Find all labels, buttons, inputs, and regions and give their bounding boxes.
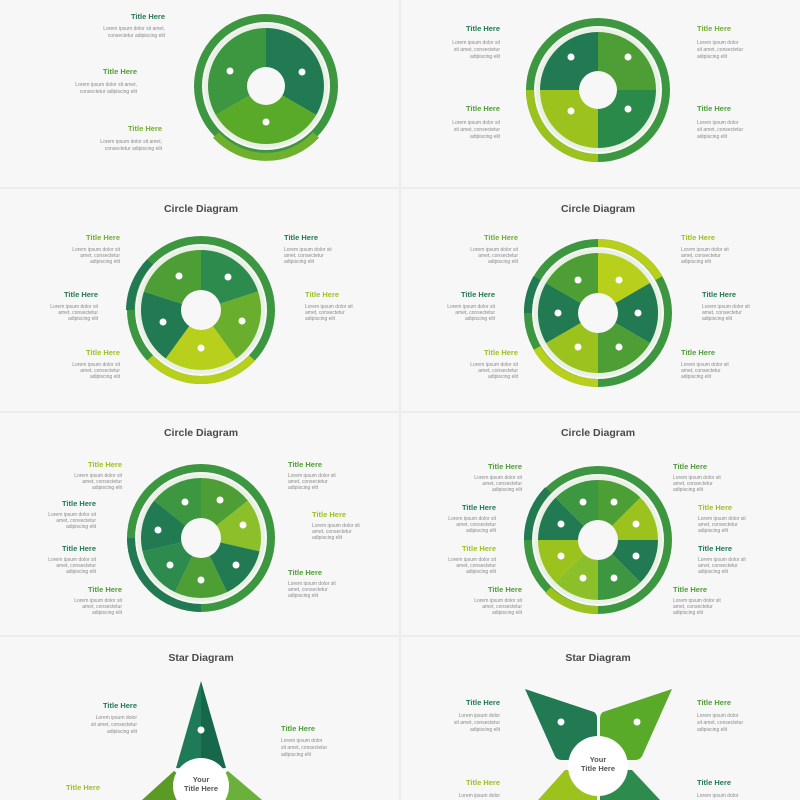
text blocks: Title Here xyxy=(86,348,120,357)
pie segments xyxy=(208,28,324,144)
text blocks: adipiscing elit xyxy=(673,610,704,616)
text blocks: Lorem ipsum dolor sit xyxy=(698,516,746,522)
text blocks: sit amet, consectetur xyxy=(281,745,327,751)
text blocks: adipiscing elit xyxy=(90,374,121,380)
text blocks: Lorem ipsum dolor sit xyxy=(72,247,121,253)
text blocks xyxy=(66,701,327,792)
heading: Circle Diagram xyxy=(164,427,238,439)
text blocks xyxy=(48,460,360,616)
text blocks xyxy=(448,462,746,616)
text blocks: adipiscing elit xyxy=(281,752,312,758)
text blocks: adipiscing elit xyxy=(92,485,123,491)
text blocks: adipiscing elit xyxy=(288,485,319,491)
text blocks xyxy=(452,24,743,140)
text blocks: adipiscing elit xyxy=(466,569,497,575)
text blocks: adipiscing elit xyxy=(470,727,501,733)
pie segments xyxy=(540,32,656,148)
text blocks: Title Here xyxy=(702,290,736,299)
text blocks: adipiscing elit xyxy=(288,593,319,599)
text blocks: amet, consectetur xyxy=(56,563,96,569)
text blocks: adipiscing elit xyxy=(698,528,729,534)
text blocks: Title Here xyxy=(288,568,322,577)
text blocks: Lorem ipsum dolor sit xyxy=(702,304,750,310)
text blocks: adipiscing elit xyxy=(284,259,315,265)
text blocks: Lorem ipsum dolor sit xyxy=(288,473,336,479)
text blocks: Lorem ipsum dolor sit xyxy=(470,362,519,368)
text blocks: Lorem ipsum dolor sit xyxy=(474,598,523,604)
heading: Circle Diagram xyxy=(561,203,635,215)
text blocks: Title Here xyxy=(697,698,731,707)
text blocks: adipiscing elit xyxy=(488,374,519,380)
text blocks: consectetur adipiscing elit xyxy=(108,33,166,39)
text blocks: amet, consectetur xyxy=(478,253,518,259)
text blocks: Title Here xyxy=(131,12,165,21)
text blocks: Title Here xyxy=(681,348,715,357)
text blocks: adipiscing elit xyxy=(92,610,123,616)
text blocks: Lorem ipsum dolor sit xyxy=(72,362,121,368)
icons xyxy=(558,718,640,726)
text blocks: Title Here xyxy=(62,544,96,553)
text blocks xyxy=(75,12,166,152)
text blocks: Title Here xyxy=(88,460,122,469)
text blocks: amet, consectetur xyxy=(288,587,328,593)
text blocks: Lorem ipsum dolor sit xyxy=(448,557,497,563)
text blocks: adipiscing elit xyxy=(312,535,343,541)
text blocks: sit amet, consectetur xyxy=(697,47,743,53)
text blocks: Lorem ipsum dolor xyxy=(96,715,137,721)
text blocks: adipiscing elit xyxy=(702,316,733,322)
center circle: Your xyxy=(590,755,606,764)
text blocks: Lorem ipsum dolor xyxy=(697,713,739,719)
text blocks: amet, consectetur xyxy=(80,253,120,259)
panel: slide 7 star diagram triangle xyxy=(66,652,327,800)
text blocks: adipiscing elit xyxy=(470,54,501,60)
top point xyxy=(176,681,226,770)
text blocks: Lorem ipsum dolor sit xyxy=(448,516,497,522)
text blocks: Lorem ipsum dolor sit xyxy=(698,557,746,563)
panel: slide 2 four-segment circle xyxy=(452,22,743,158)
text blocks: adipiscing elit xyxy=(492,610,523,616)
icons xyxy=(160,272,246,352)
text blocks: Lorem ipsum dolor sit xyxy=(474,475,523,481)
text blocks: Title Here xyxy=(103,701,137,710)
text blocks: Title Here xyxy=(128,124,162,133)
outer ring arrows xyxy=(198,18,334,157)
text blocks: Title Here xyxy=(484,348,518,357)
text blocks: Lorem ipsum dolor sit xyxy=(452,120,501,126)
icons xyxy=(558,498,640,582)
text blocks: Title Here xyxy=(62,499,96,508)
text blocks: Lorem ipsum dolor sit xyxy=(288,581,336,587)
text blocks: Lorem ipsum dolor sit xyxy=(681,362,729,368)
text blocks: amet, consectetur xyxy=(698,522,738,528)
text blocks: amet, consectetur xyxy=(82,479,122,485)
center circle: Your xyxy=(193,775,209,784)
text blocks: adipiscing elit xyxy=(466,528,497,534)
pie segments xyxy=(141,478,261,598)
text blocks: Lorem ipsum dolor xyxy=(697,120,739,126)
text blocks: adipiscing elit xyxy=(470,134,501,140)
text blocks: Lorem ipsum dolor xyxy=(459,713,500,719)
text blocks: Title Here xyxy=(88,585,122,594)
pie segments xyxy=(141,250,261,370)
text blocks: adipiscing elit xyxy=(488,259,519,265)
panel: slide 1 three-segment circle xyxy=(75,12,334,157)
text blocks: Lorem ipsum dolor sit amet, xyxy=(75,82,137,88)
text blocks: adipiscing elit xyxy=(697,134,728,140)
text blocks: Lorem ipsum dolor sit xyxy=(284,247,332,253)
text blocks: adipiscing elit xyxy=(492,487,523,493)
heading: Star Diagram xyxy=(565,652,631,664)
icons xyxy=(554,276,642,350)
text blocks: Title Here xyxy=(697,778,731,787)
text blocks: sit amet, consectetur xyxy=(91,722,137,728)
text blocks: Lorem ipsum dolor sit xyxy=(681,247,729,253)
text blocks: Lorem ipsum dolor sit xyxy=(312,523,360,529)
text blocks: adipiscing elit xyxy=(90,259,121,265)
text blocks: Title Here xyxy=(466,698,500,707)
text blocks: amet, consectetur xyxy=(482,481,522,487)
text blocks: Lorem ipsum dolor sit amet, xyxy=(103,26,165,32)
text blocks: amet, consectetur xyxy=(455,310,495,316)
pie segments xyxy=(538,253,658,373)
petals xyxy=(525,689,672,800)
text blocks: Lorem ipsum dolor sit xyxy=(673,475,721,481)
text blocks: Title Here xyxy=(466,778,500,787)
text blocks: adipiscing elit xyxy=(697,54,728,60)
text blocks: sit amet, consectetur xyxy=(454,720,500,726)
text blocks: adipiscing elit xyxy=(697,727,728,733)
text blocks: Title Here xyxy=(673,462,707,471)
text blocks: adipiscing elit xyxy=(68,316,99,322)
text blocks: consectetur adipiscing elit xyxy=(105,146,163,152)
text blocks: Title Here xyxy=(305,290,339,299)
icons xyxy=(154,496,246,584)
text blocks: Title Here xyxy=(288,460,322,469)
text blocks: Lorem ipsum dolor sit amet, xyxy=(100,139,162,145)
text blocks: amet, consectetur xyxy=(456,563,496,569)
text blocks: Title Here xyxy=(484,233,518,242)
text blocks: amet, consectetur xyxy=(702,310,742,316)
text blocks: Lorem ipsum dolor xyxy=(697,40,739,46)
text blocks: Title Here xyxy=(281,724,315,733)
text blocks: adipiscing elit xyxy=(66,524,97,530)
text blocks: Title Here xyxy=(86,233,120,242)
text blocks: amet, consectetur xyxy=(673,481,713,487)
text blocks: Title Here xyxy=(64,290,98,299)
text blocks: consectetur adipiscing elit xyxy=(80,89,138,95)
text blocks: Lorem ipsum dolor sit xyxy=(447,304,496,310)
panel: slide 6 eight-segment circle xyxy=(448,427,746,616)
text blocks: Title Here xyxy=(284,233,318,242)
text blocks: sit amet, consectetur xyxy=(697,127,743,133)
text blocks: amet, consectetur xyxy=(681,253,721,259)
text blocks: adipiscing elit xyxy=(698,569,729,575)
text blocks xyxy=(50,233,353,380)
text blocks: amet, consectetur xyxy=(681,368,721,374)
icons xyxy=(568,54,632,114)
text blocks: amet, consectetur xyxy=(58,310,98,316)
panel: slide 5 seven-segment circle xyxy=(48,427,360,616)
text blocks: Title Here xyxy=(461,290,495,299)
text blocks: Lorem ipsum dolor sit xyxy=(470,247,519,253)
heading: Circle Diagram xyxy=(164,203,238,215)
center circle: Title Here xyxy=(581,764,615,773)
text blocks: Lorem ipsum dolor xyxy=(281,738,323,744)
panel: slide 4 six-segment circle xyxy=(447,203,750,383)
bottom lobes xyxy=(142,771,262,800)
text blocks: Title Here xyxy=(698,503,732,512)
text blocks: adipiscing elit xyxy=(305,316,336,322)
text blocks xyxy=(447,233,750,380)
text blocks: amet, consectetur xyxy=(288,479,328,485)
text blocks: Title Here xyxy=(697,104,731,113)
text blocks: Lorem ipsum dolor xyxy=(697,793,739,799)
text blocks: Lorem ipsum dolor xyxy=(459,793,500,799)
text blocks: Title Here xyxy=(488,462,522,471)
text blocks: sit amet, consectetur xyxy=(454,47,500,53)
text blocks: adipiscing elit xyxy=(681,374,712,380)
text blocks: Title Here xyxy=(312,510,346,519)
text blocks: Lorem ipsum dolor sit xyxy=(673,598,721,604)
text blocks: Title Here xyxy=(466,24,500,33)
text blocks: amet, consectetur xyxy=(673,604,713,610)
text blocks: Lorem ipsum dolor sit xyxy=(48,557,97,563)
panel: slide 8 star diagram four petals xyxy=(454,652,743,800)
text blocks: amet, consectetur xyxy=(456,522,496,528)
pie segments xyxy=(538,480,658,600)
text blocks: Title Here xyxy=(462,503,496,512)
text blocks: Lorem ipsum dolor sit xyxy=(452,40,501,46)
text blocks: amet, consectetur xyxy=(56,518,96,524)
text blocks: amet, consectetur xyxy=(698,563,738,569)
text blocks: Title Here xyxy=(488,585,522,594)
panel: slide 3 five-segment circle xyxy=(50,203,353,380)
text blocks: Title Here xyxy=(697,24,731,33)
text blocks: Lorem ipsum dolor sit xyxy=(74,598,123,604)
text blocks: Title Here xyxy=(466,104,500,113)
text blocks: Title Here xyxy=(698,544,732,553)
text blocks: Title Here xyxy=(462,544,496,553)
text blocks: Lorem ipsum dolor sit xyxy=(50,304,99,310)
text blocks: adipiscing elit xyxy=(107,729,138,735)
text blocks: Lorem ipsum dolor sit xyxy=(48,512,97,518)
text blocks xyxy=(454,698,743,799)
text blocks: amet, consectetur xyxy=(82,604,122,610)
text blocks: adipiscing elit xyxy=(66,569,97,575)
text blocks: sit amet, consectetur xyxy=(697,720,743,726)
center circle: Title Here xyxy=(184,784,218,793)
text blocks: amet, consectetur xyxy=(478,368,518,374)
heading: Star Diagram xyxy=(168,652,234,664)
text blocks: adipiscing elit xyxy=(465,316,496,322)
text blocks: sit amet, consectetur xyxy=(454,127,500,133)
text blocks: adipiscing elit xyxy=(681,259,712,265)
text blocks: amet, consectetur xyxy=(482,604,522,610)
heading: Circle Diagram xyxy=(561,427,635,439)
text blocks: Lorem ipsum dolor sit xyxy=(74,473,123,479)
center circle xyxy=(173,758,229,800)
text blocks: Title Here xyxy=(681,233,715,242)
text blocks: adipiscing elit xyxy=(673,487,704,493)
icons xyxy=(226,68,306,126)
text blocks: Title Here xyxy=(673,585,707,594)
text blocks: amet, consectetur xyxy=(284,253,324,259)
text blocks: Lorem ipsum dolor sit xyxy=(305,304,353,310)
icon xyxy=(198,726,204,734)
text blocks: amet, consectetur xyxy=(80,368,120,374)
text blocks: amet, consectetur xyxy=(312,529,352,535)
center circle xyxy=(568,736,628,796)
text blocks: Title Here xyxy=(66,783,100,792)
text blocks: Title Here xyxy=(103,67,137,76)
text blocks: amet, consectetur xyxy=(305,310,345,316)
